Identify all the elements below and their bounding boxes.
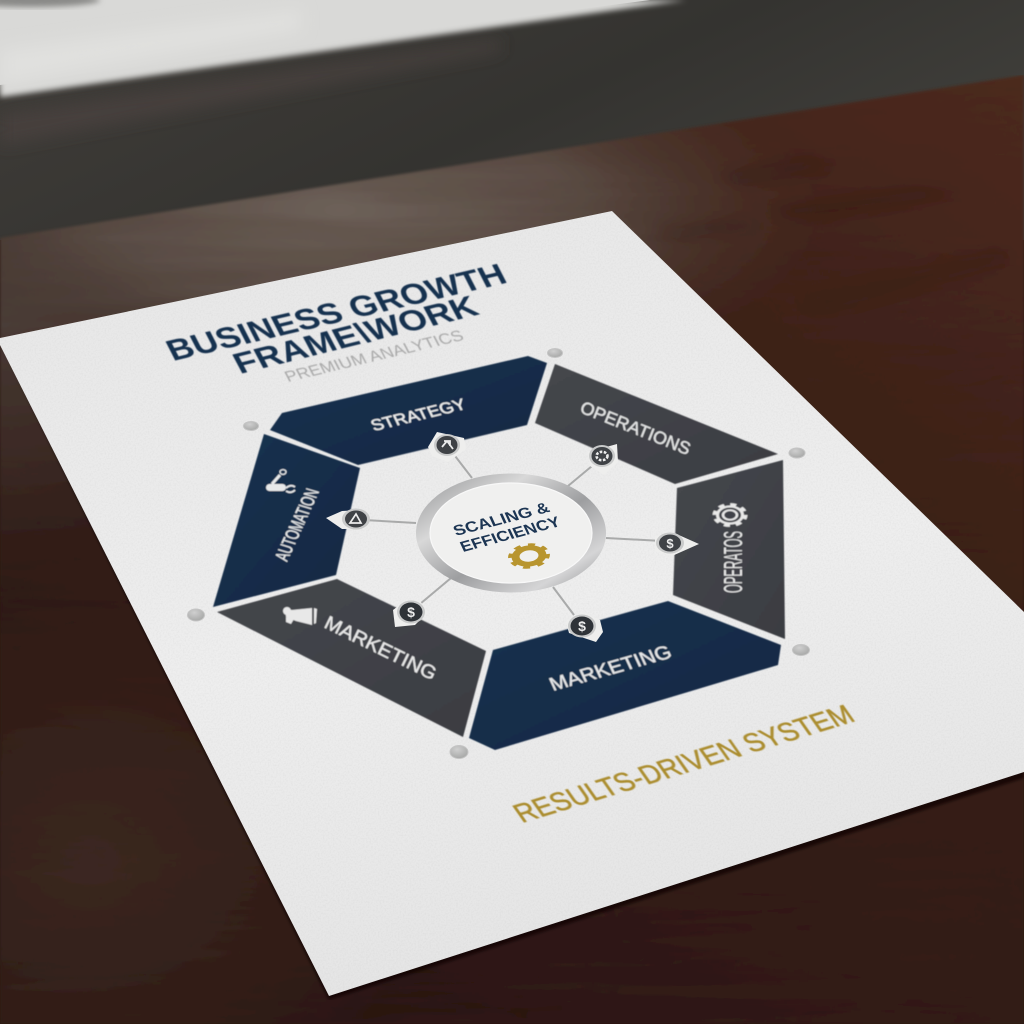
title line 2: FRAME\WORK	[227, 290, 484, 380]
pin: marketing slate	[393, 600, 428, 627]
corner dots	[188, 348, 810, 758]
pin: operatos: $	[666, 536, 674, 551]
segment: marketing slate	[217, 579, 486, 737]
paper shadow	[0, 345, 1024, 1000]
icon: gold gear	[509, 543, 549, 569]
subtitle: PREMIUM ANALYTICS	[282, 328, 467, 386]
pin: marketing navy: $	[578, 618, 586, 634]
pin: marketing slate: $	[407, 604, 415, 620]
automation label: AUTOMATION	[272, 486, 324, 563]
segment: operatos: OPERATOS	[718, 531, 748, 593]
icon: gear	[715, 505, 745, 525]
pin: operations	[588, 444, 618, 475]
segment: strategy	[270, 356, 547, 465]
tagline: RESULTS-DRIVEN SYSTEM	[507, 700, 860, 828]
segment: operations	[535, 364, 778, 484]
center label line 1: SCALING &	[451, 500, 553, 540]
center label line 2: EFFICIENCY	[457, 514, 563, 556]
panel: paper sheet	[0, 211, 1024, 996]
marketing label navy: MARKETING	[546, 642, 675, 696]
icon: megaphone	[283, 607, 317, 625]
operations label: OPERATIONS	[578, 397, 694, 459]
pin: automation	[326, 508, 370, 530]
connector lines	[364, 452, 662, 615]
segment: marketing navy	[469, 601, 781, 750]
center: metal ring	[416, 474, 606, 592]
pin: operatos	[655, 532, 699, 556]
strategy label: STRATEGY	[368, 396, 469, 435]
icon: robot arm	[266, 470, 295, 492]
title	[160, 258, 512, 386]
segment: operatos	[673, 460, 785, 639]
title line 1: BUSINESS GROWTH	[160, 258, 512, 367]
pin: strategy	[428, 432, 466, 462]
pin: marketing navy	[566, 612, 603, 642]
segment: automation	[213, 434, 360, 607]
background: blurred window and wall	[0, 0, 1024, 240]
marketing label slate: MARKETING	[321, 613, 440, 685]
